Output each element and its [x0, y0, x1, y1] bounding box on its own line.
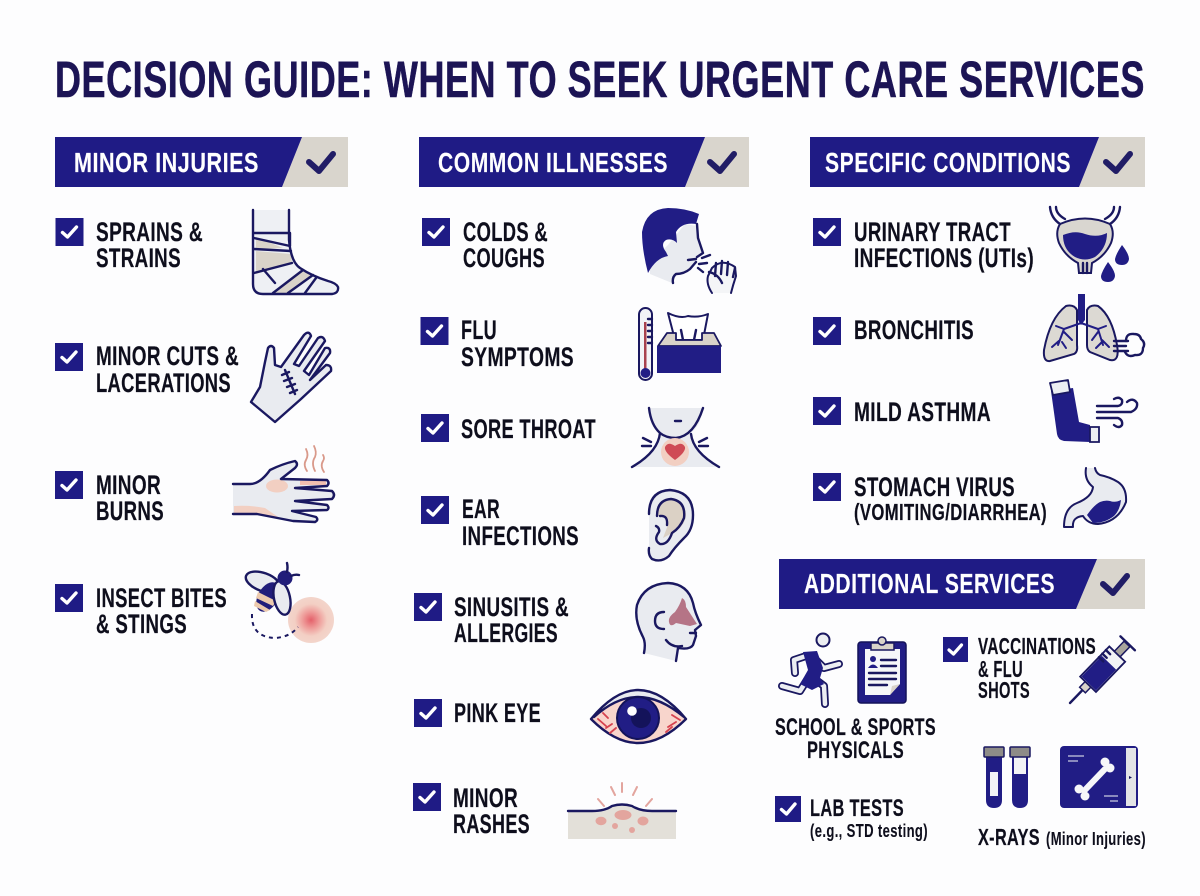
item: x-rays: [978, 746, 1146, 850]
heading: additional services: [779, 559, 1145, 609]
item: flu symptoms: SYMPTOMS: [461, 342, 574, 372]
item: mild asthma: [813, 380, 1137, 442]
item: pink eye: PINK EYE: [454, 698, 541, 728]
icon: bladder: [1050, 207, 1129, 282]
item: urinary tract infections: INFECTIONS (UTIs): [854, 243, 1034, 273]
item: insect bites and stings: & STINGS: [96, 609, 187, 639]
item: insect bites and stings: [55, 563, 334, 643]
item: sprains and strains: [56, 210, 338, 294]
item: sore throat: [421, 408, 719, 467]
panel: common illnesses: [413, 137, 749, 839]
item: colds and coughs: [422, 208, 736, 293]
heading: specific conditions: [810, 137, 1145, 187]
item: urinary tract infections: URINARY TRACT: [854, 217, 1011, 247]
item: sinusitis and allergies: ALLERGIES: [454, 618, 558, 648]
item: vaccinations and flu shots: SHOTS: [978, 677, 1030, 703]
item: bronchitis: BRONCHITIS: [854, 315, 974, 345]
icon: clipboard: [858, 637, 906, 703]
item: urinary tract infections: [813, 207, 1129, 282]
item: lab tests: (e.g., STD testing): [810, 821, 928, 841]
item: mild asthma: MILD ASTHMA: [854, 397, 991, 427]
item: pink eye: [414, 690, 686, 743]
icon: pink eye: [591, 690, 686, 743]
item: lab tests: [775, 795, 928, 841]
icon: burned hand: [233, 446, 334, 522]
item: minor rashes: MINOR: [453, 783, 518, 813]
item: school and sports physicals: PHYSICALS: [807, 737, 904, 764]
icon: hand with stitches: [251, 333, 331, 422]
item: sore throat: SORE THROAT: [461, 414, 596, 444]
item: stomach virus: (VOMITING/DIARRHEA): [854, 499, 1047, 525]
item: minor burns: MINOR: [96, 470, 161, 500]
heading: minor injuries: MINOR INJURIES: [74, 147, 259, 178]
item: x-rays: (Minor Injuries): [1046, 829, 1146, 849]
item: bronchitis: [813, 294, 1144, 361]
icon: lungs: [1044, 294, 1144, 361]
heading: specific conditions: SPECIFIC CONDITIONS: [825, 147, 1071, 178]
heading: minor injuries: [55, 137, 348, 187]
item: insect bites and stings: INSECT BITES: [96, 583, 227, 613]
icon: thermometer and tissue box: [639, 308, 721, 380]
item: school and sports physicals: [775, 634, 936, 764]
icon: inhaler: [1050, 380, 1137, 442]
item: vaccinations and flu shots: & FLU: [978, 656, 1023, 682]
item: colds and coughs: COUGHS: [463, 243, 545, 273]
icon: stomach: [1064, 468, 1126, 527]
item: vaccinations and flu shots: [943, 633, 1136, 711]
item: sinusitis and allergies: [414, 583, 701, 661]
heading: common illnesses: [419, 137, 749, 187]
icon: syringe: [1062, 636, 1136, 711]
heading: common illnesses: COMMON ILLNESSES: [438, 147, 668, 178]
panel: specific conditions: [810, 137, 1145, 527]
heading: additional services: ADDITIONAL SERVICES: [804, 568, 1055, 599]
panel: additional services: [775, 559, 1146, 850]
icon: skin rash: [568, 783, 676, 839]
item: sprains and strains: STRAINS: [96, 243, 181, 273]
icon: sore throat: [632, 408, 719, 467]
item: minor burns: [55, 446, 334, 526]
icon: head with sinuses: [636, 583, 701, 661]
item: minor rashes: RASHES: [453, 809, 530, 839]
item: lab tests: LAB TESTS: [810, 795, 904, 822]
item: flu symptoms: [420, 308, 721, 380]
icon: runner: [782, 634, 839, 704]
icon: ear: [649, 490, 693, 560]
item: x-rays: X-RAYS: [978, 824, 1040, 850]
icon: x-ray image: [1060, 746, 1138, 808]
item: minor rashes: [413, 783, 676, 839]
item: flu symptoms: FLU: [461, 315, 497, 345]
item: sinusitis and allergies: SINUSITIS &: [454, 592, 569, 622]
item: school and sports physicals: SCHOOL & SPORTS: [775, 714, 936, 741]
panel: minor injuries: [55, 137, 348, 643]
icon: test tubes: [984, 747, 1030, 808]
item: ear infections: EAR: [462, 494, 500, 524]
item: minor burns: BURNS: [96, 496, 164, 526]
item: minor cuts and lacerations: MINOR CUTS &: [96, 341, 239, 371]
item: minor cuts and lacerations: [55, 333, 331, 422]
item: ear infections: [421, 490, 693, 560]
icon: person coughing: [642, 208, 736, 293]
icon: bandaged ankle: [253, 210, 338, 294]
item: stomach virus: STOMACH VIRUS: [854, 472, 1015, 502]
item: colds and coughs: COLDS &: [463, 217, 548, 247]
item: minor cuts and lacerations: LACERATIONS: [96, 368, 231, 398]
item: sprains and strains: SPRAINS &: [96, 217, 203, 247]
item: vaccinations and flu shots: VACCINATIONS: [978, 633, 1096, 659]
item: stomach virus: [813, 468, 1126, 527]
icon: bee and sting: [243, 563, 334, 643]
item: ear infections: INFECTIONS: [462, 521, 579, 551]
